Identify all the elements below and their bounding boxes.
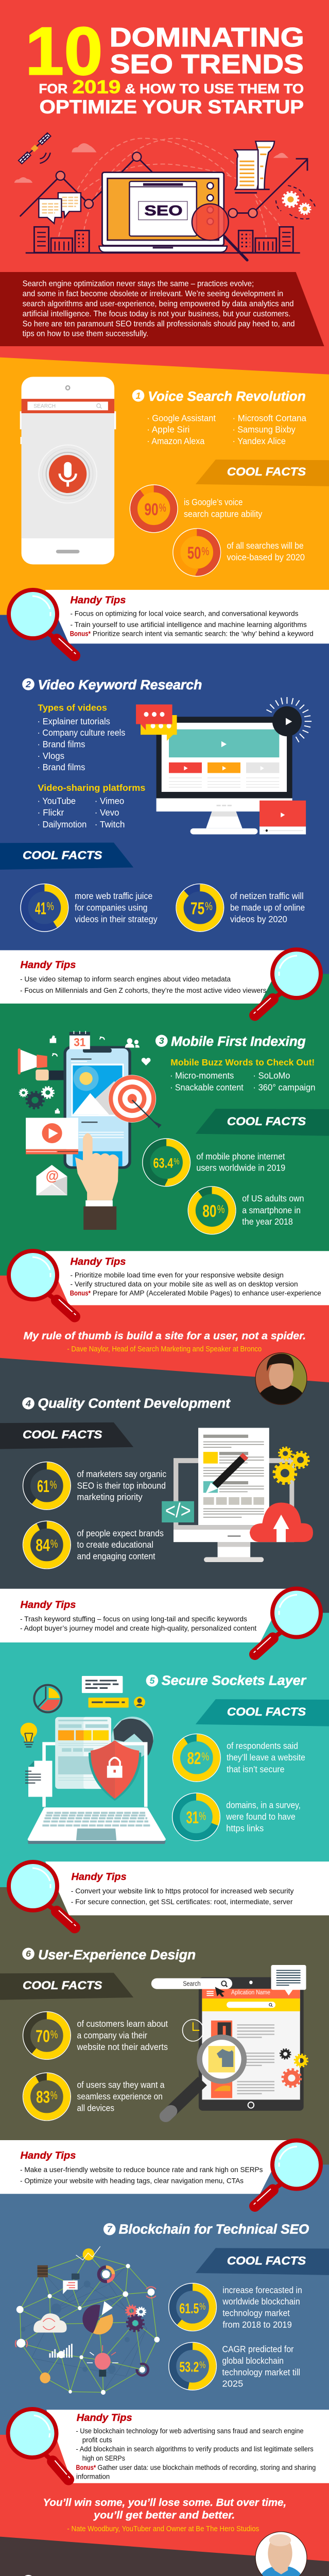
tips text: - Verify structured data on your mobile site as well as on desktop version: [70, 1280, 298, 1289]
stat: 53.2%: 2025: [222, 2379, 243, 2388]
stat: 61%: %: [50, 1478, 57, 1491]
list: types of videos: Types of videos: [38, 703, 107, 713]
panel: handy tips 7: [3, 2406, 329, 2483]
stat: 80%: 80: [202, 1201, 217, 1221]
panel: section 6 user-experience design: [0, 1947, 307, 2121]
stat: 41%: videos in their strategy: [75, 914, 158, 924]
illustration: laptop with shield: [21, 1676, 166, 1844]
tips text: Handy Tips: [77, 2412, 132, 2424]
panel: section 5 secure sockets layer: [21, 1673, 329, 1844]
tips text: Bonus*: [70, 630, 91, 638]
heading: user-experience design: 6: [26, 1948, 31, 1959]
quote text: My rule of thumb is build a site for a user, not a spider.: [24, 1330, 306, 1342]
intro paragraph: and some in fact become obsolete or irrelevant. We’re seeing development in: [23, 290, 283, 298]
tips text: - Focus on Millennials and Gen Z cohorts, they’re the most active video viewers: [20, 987, 266, 995]
tips text: [20, 959, 266, 995]
quote attribution: - Nate Woodbury, YouTuber and Owner at Be The Hero Studios: [67, 2525, 259, 2533]
stat: 61%: of marketers say organic: [77, 1469, 166, 1479]
tips text: - Make a user-friendly website to reduce bounce rate and rank high on SERPs: [20, 2166, 263, 2174]
stat: 70%: of customers learn about: [77, 2019, 168, 2029]
illustration: phone with target and hand: [18, 1031, 162, 1230]
stat: 83%: [23, 2073, 165, 2121]
stat: 50%: [173, 529, 305, 576]
icon: magnifying glass: [3, 2406, 78, 2480]
tips band: [0, 950, 287, 1004]
stat: 61%: marketing priority: [77, 1492, 143, 1502]
stat: 61.5%: worldwide blockchain: [222, 2296, 300, 2307]
illustration: tablet with magnifier: [151, 1965, 307, 2116]
stat: 50%: 50: [187, 544, 201, 563]
intro paragraph: artificial intelligence. The focus today is not your business, but your customers.: [23, 310, 290, 318]
tips text: Handy Tips: [21, 959, 76, 971]
list: mobile buzz words: [170, 1057, 315, 1092]
title: 10: [25, 13, 103, 89]
cool facts ribbon: COOL FACTS: [227, 466, 306, 478]
heading: blockchain for technical SEO: Blockchain for Technical SEO: [119, 2222, 309, 2236]
tips band: [45, 1861, 329, 1916]
title: SEO TRENDS: [110, 49, 304, 79]
illustration: phone with microphone: SEARCH: [33, 403, 56, 409]
illustration: tablet with magnifier: Search: [183, 1980, 201, 1987]
illustration: content monitor: [162, 1428, 313, 1562]
tips text: [76, 2412, 316, 2481]
tips text: profit cuts: [82, 2436, 112, 2445]
tips band: [46, 2410, 329, 2483]
cool facts ribbon: COOL FACTS: [23, 849, 102, 861]
tips text: Prioritize search intent via semantic search: the ‘why’ behind a keyword: [93, 630, 314, 638]
cool facts ribbon: COOL FACTS: [227, 1115, 306, 1128]
background: section 3 green: [0, 974, 329, 1276]
stat: 90%: %: [159, 501, 166, 514]
stat: 70%: website not their adverts: [77, 2042, 168, 2052]
stat: 63.4%: [143, 1139, 285, 1186]
panel: header: [14, 13, 315, 338]
list: types of videos: · Explainer tutorials: [38, 716, 110, 726]
icon: magnifying glass: [253, 2140, 321, 2206]
stat: 83%: %: [50, 2089, 58, 2102]
panel: quote Nate Woodbury: [67, 2510, 308, 2576]
stat: 75%: of netizen traffic will: [230, 891, 304, 901]
tips text: Bonus*: [70, 1290, 91, 1297]
stat: 63.4%: 63.4: [153, 1155, 173, 1171]
heading: voice search revolution: Voice Search Revolution: [148, 389, 306, 404]
panel: section 2 video keyword research: [0, 677, 311, 931]
portrait: Dave Naylor: [254, 1351, 308, 1408]
stat: 90%: search capture ability: [184, 509, 263, 519]
stat: 31%: were found to have: [226, 1811, 296, 1822]
stat: 53.2%: global blockchain: [222, 2355, 284, 2366]
cool facts ribbon: [196, 2248, 329, 2275]
stat: 70%: [23, 2012, 168, 2059]
list: video-sharing platforms: · YouTube: [38, 796, 76, 806]
stat: 82%: %: [201, 1750, 209, 1763]
tips text: - Train yourself to use artificial intelligence and machine learning algorithms: [70, 621, 307, 629]
tips band: [0, 2140, 287, 2194]
tips text: Handy Tips: [70, 1256, 126, 1267]
stat: 80%: [188, 1187, 304, 1234]
intro paragraph: tips on how to use them successfully.: [23, 330, 148, 338]
panel: handy tips 5: [9, 1861, 329, 1928]
stat: 75%: 75: [191, 899, 204, 918]
heading: user-experience design: User-Experience Design: [38, 1947, 196, 1962]
stat: 50%: %: [201, 545, 209, 557]
stat: 31%: %: [199, 1809, 206, 1822]
stat: 50%: voice-based by 2020: [227, 552, 305, 562]
stat: 41%: [21, 884, 158, 931]
background: section 8 brown: [0, 2537, 329, 2576]
stat: 61.5%: %: [199, 2302, 205, 2312]
list: voice assistants: [147, 413, 306, 446]
cool facts ribbon: [196, 1699, 329, 1726]
stat: 75%: [176, 884, 305, 931]
background: section 7 steel blue: [0, 2165, 329, 2435]
stat: 61.5%: [169, 2283, 302, 2331]
stat: 75%: videos by 2020: [230, 914, 287, 924]
tips text: Handy Tips: [21, 1599, 76, 1611]
list: types of videos: · Vlogs: [38, 751, 64, 761]
stat: 84%: 84: [36, 1536, 50, 1555]
stat: 41%: %: [46, 900, 54, 912]
heading: blockchain for technical SEO: 7: [107, 2224, 113, 2234]
stat: 41%: more web traffic juice: [75, 891, 152, 901]
stat: 82%: of respondents said: [227, 1741, 298, 1751]
stat: 84%: to create educational: [77, 1539, 153, 1550]
list: video-sharing platforms: · Twitch: [95, 819, 125, 829]
icon: magnifying glass: [253, 1589, 321, 1654]
stat: 90%: 90: [144, 500, 159, 519]
stat: 83%: all devices: [77, 2103, 114, 2113]
background: quote 2 red: [0, 2435, 329, 2566]
panel: section 3 mobile first indexing: [18, 1031, 329, 1234]
tips text: Handy Tips: [71, 1871, 127, 1883]
intro paragraph: [23, 280, 295, 338]
list: types of videos: · Company culture reels: [38, 727, 125, 738]
stat: 53.2%: CAGR predicted for: [222, 2344, 294, 2354]
panel: section 8 influencer marketing: [0, 2574, 302, 2576]
stat: 80%: a smartphone in: [242, 1205, 301, 1215]
title: OPTIMIZE YOUR STARTUP: [40, 97, 304, 118]
stat: 82%: they’ll leave a website: [227, 1753, 305, 1762]
tips text: [70, 595, 314, 638]
stat: 63.4%: users worldwide in 2019: [196, 1163, 285, 1173]
tips text: Handy Tips: [70, 595, 126, 606]
tips text: - Adopt buyer’s journey model and create high-quality, personalized content: [20, 1624, 256, 1633]
list: voice assistants: · Samsung Bixby: [233, 425, 296, 434]
icon: magnifying glass: [9, 1862, 76, 1928]
stat: 70%: 70: [36, 2027, 50, 2046]
cool facts ribbon: COOL FACTS: [23, 1429, 102, 1441]
cool facts ribbon: [0, 842, 133, 870]
list: video-sharing platforms: · Flickr: [38, 807, 64, 818]
heading: video keyword research: 2: [25, 679, 31, 689]
cool facts ribbon: [196, 460, 329, 486]
stat: 84%: [23, 1521, 164, 1569]
illustration: content monitor: </>: [165, 1500, 191, 1522]
illustration: blockchain network: [15, 2246, 160, 2395]
list: mobile buzz words: · Micro-moments: [170, 1071, 234, 1081]
list: mobile buzz words: · 360° campaign: [253, 1082, 315, 1092]
panel: section 1 voice search revolution: [20, 377, 329, 576]
tips band: [45, 590, 329, 643]
tips text: Handy Tips: [21, 2150, 76, 2161]
background: header red: [0, 0, 329, 366]
stat: 61.5%: from 2018 to 2019: [222, 2319, 292, 2330]
background: intro band: [0, 272, 324, 346]
list: voice assistants: · Amazon Alexa: [147, 436, 205, 446]
list: voice assistants: · Microsoft Cortana: [233, 413, 306, 423]
heading: mobile first indexing: Mobile First Indexing: [171, 1034, 306, 1049]
intro paragraph: Search engine optimization never stays the same – practices evolve;: [23, 280, 254, 288]
icon: magnifying glass: [9, 1251, 76, 1317]
stat: 63.4%: of mobile phone internet: [196, 1151, 285, 1161]
list: video-sharing platforms: · Dailymotion: [38, 819, 86, 829]
stat: 90%: [130, 485, 263, 532]
background: section 4 slate: [0, 1358, 329, 1613]
background: section 5 teal: [0, 1613, 329, 1888]
illustration: phone with microphone: [20, 377, 116, 564]
panel: handy tips 4: [0, 1589, 321, 1654]
illustration: phone with target and hand: @: [46, 1168, 59, 1183]
tips band: [0, 1589, 287, 1642]
stat: 82%: [173, 1734, 305, 1782]
heading: secure sockets layer: 5: [149, 1675, 155, 1686]
title: FOR: [39, 81, 67, 96]
tips text: - Optimize your website with heading tags, clear navigation menu, CTAs: [20, 2177, 244, 2185]
heading: quality content development: Quality Content Development: [38, 1396, 231, 1411]
icon: magnifying glass: [253, 950, 321, 1015]
stat: 41%: for companies using: [75, 903, 147, 912]
intro paragraph: So here are ten paramount SEO trends all professionals should pay heed to, and: [23, 320, 295, 328]
cool facts ribbon: [196, 1109, 329, 1136]
tips text: - Prioritize mobile load time even for your responsive website design: [70, 1272, 284, 1279]
stat: 84%: and engaging content: [77, 1551, 155, 1562]
title: [25, 13, 304, 118]
icon: magnifying glass: [9, 590, 76, 655]
cool facts ribbon: COOL FACTS: [227, 2255, 306, 2267]
stat: 31%: 31: [186, 1808, 199, 1827]
cool facts ribbon: COOL FACTS: [23, 1979, 102, 1992]
background: section 2 blue: [0, 615, 329, 974]
list: types of videos: [38, 703, 125, 772]
stat: 61%: 61: [37, 1477, 49, 1496]
stat: 61.5%: technology market: [222, 2308, 290, 2318]
illustration: phone with target and hand: 31: [74, 1036, 85, 1048]
stat: 41%: 41: [35, 899, 46, 918]
stat: 80%: %: [217, 1202, 224, 1215]
panel: quote Dave Naylor: [24, 1330, 308, 1408]
stat: 80%: the year 2018: [242, 1216, 293, 1227]
panel: handy tips 1: [9, 590, 329, 655]
portrait: Nate Woodbury: [254, 2530, 308, 2576]
panel: handy tips 6: [0, 2140, 321, 2206]
stat: 31%: domains, in a survey,: [226, 1800, 301, 1810]
quote: Nate Woodbury text line 1: You’ll win some, you’ll lose some. But over time,: [43, 2497, 286, 2509]
panel: section 7 blockchain for technical SEO: [15, 2222, 329, 2509]
tips band: [45, 1251, 329, 1305]
background: section 6 olive: [0, 1887, 329, 2165]
list: video-sharing platforms: [38, 783, 146, 829]
tips text: - Use video sitemap to inform search engines about video metadata: [20, 975, 231, 984]
tips text: - Convert your website link to https protocol for increased web security: [71, 1887, 294, 1895]
cool facts ribbon: [0, 1422, 133, 1449]
illustration: monitor with videos: [136, 697, 311, 835]
stat: 53.2%: technology market till: [222, 2367, 300, 2377]
heading: voice search revolution: 1: [136, 391, 141, 401]
stat: 80%: of US adults own: [242, 1194, 304, 1204]
heading: secure sockets layer: Secure Sockets Layer: [162, 1673, 307, 1688]
title: DOMINATING: [110, 23, 304, 53]
list: video-sharing platforms: Video-sharing platforms: [38, 783, 146, 793]
tips text: Bonus*: [76, 2464, 96, 2472]
tips text: [20, 1599, 256, 1633]
stat: 53.2%: [169, 2343, 300, 2390]
list: voice assistants: · Yandex Alice: [233, 436, 286, 446]
stat: 63.4%: %: [174, 1156, 179, 1166]
stat: 83%: of users say they want a: [77, 2080, 165, 2090]
list: types of videos: · Brand films: [38, 762, 85, 772]
list: voice assistants: · Apple Siri: [147, 425, 189, 434]
background: section 1 orange: [0, 358, 329, 615]
stat: 61%: [23, 1462, 166, 1510]
title: 2019: [73, 77, 120, 97]
list: mobile buzz words: Mobile Buzz Words to Check Out!: [170, 1057, 315, 1067]
stat: 82%: that isn’t secure: [227, 1764, 285, 1774]
stat: 82%: 82: [187, 1749, 201, 1768]
quote text line 2: you’ll get better and better.: [93, 2510, 235, 2521]
tips text: [20, 2150, 263, 2185]
stat: 31%: https links: [226, 1823, 264, 1833]
stat: 90%: is Google’s voice: [184, 497, 243, 507]
heading: video keyword research: Video Keyword Research: [38, 677, 202, 692]
tips text: - Focus on optimizing for local voice search, and conversational keywords: [70, 610, 298, 618]
tips text: information: [76, 2473, 110, 2481]
list: types of videos: · Brand films: [38, 739, 85, 749]
panel: handy tips 2: [0, 950, 321, 1015]
title: & HOW TO USE THEM TO: [125, 81, 304, 96]
tips text: - Trash keyword stuffing – focus on using long-tail and specific keywords: [20, 1615, 247, 1623]
heading: mobile first indexing: 3: [159, 1036, 164, 1046]
heading: quality content development: 4: [25, 1398, 31, 1409]
stat: 61%: SEO is their top inbound: [77, 1481, 166, 1490]
hero illustration: SEO laptop: [14, 132, 315, 260]
list: mobile buzz words: · SoLoMo: [253, 1071, 290, 1081]
tips text: [70, 1256, 321, 1297]
tips text: high on SERPs: [82, 2454, 125, 2463]
stat: 53.2%: %: [199, 2360, 205, 2371]
stat: 53.2%: 53.2: [179, 2359, 199, 2375]
stat: 83%: seamless experience on: [77, 2091, 163, 2102]
list: video-sharing platforms: · Vevo: [95, 807, 119, 818]
stat: 70%: a company via their: [77, 2030, 147, 2040]
illustration: tablet with magnifier: Aplication Name: [231, 1989, 270, 1996]
intro paragraph: search algorithms and user-experience, being empowered by data analytics and: [23, 300, 294, 308]
tips text: [71, 1871, 294, 1906]
stat: 83%: 83: [36, 2088, 50, 2107]
quote attribution: - Dave Naylor, Head of Search Marketing and Speaker at Bronco: [67, 1346, 262, 1353]
tips text: - For secure connection, get SSL certificates: root, intermediate, server: [71, 1898, 293, 1906]
list: voice assistants: · Google Assistant: [147, 413, 216, 423]
hero illustration: SEO laptop: SEO: [144, 203, 183, 219]
stat: 50%: of all searches will be: [227, 541, 304, 551]
stat: 75%: be made up of online: [230, 903, 305, 912]
list: mobile buzz words: · Snackable content: [170, 1082, 244, 1092]
stat: 84%: of people expect brands: [77, 1528, 164, 1538]
panel: section 4 quality content development: [0, 1396, 313, 1569]
panel: handy tips 3: [9, 1251, 329, 1317]
stat: 75%: %: [205, 900, 213, 912]
list: video-sharing platforms: · Vimeo: [95, 796, 124, 806]
stat: 70%: %: [50, 2028, 58, 2041]
stat: 61.5%: 61.5: [179, 2300, 199, 2317]
stat: 61.5%: increase forecasted in: [222, 2285, 302, 2295]
stat: 31%: [172, 1793, 301, 1841]
cool facts ribbon: COOL FACTS: [227, 1706, 306, 1718]
cool facts ribbon: [0, 1973, 133, 2000]
background: quote 1 red: [0, 1276, 329, 1386]
stat: 84%: %: [50, 1537, 58, 1550]
